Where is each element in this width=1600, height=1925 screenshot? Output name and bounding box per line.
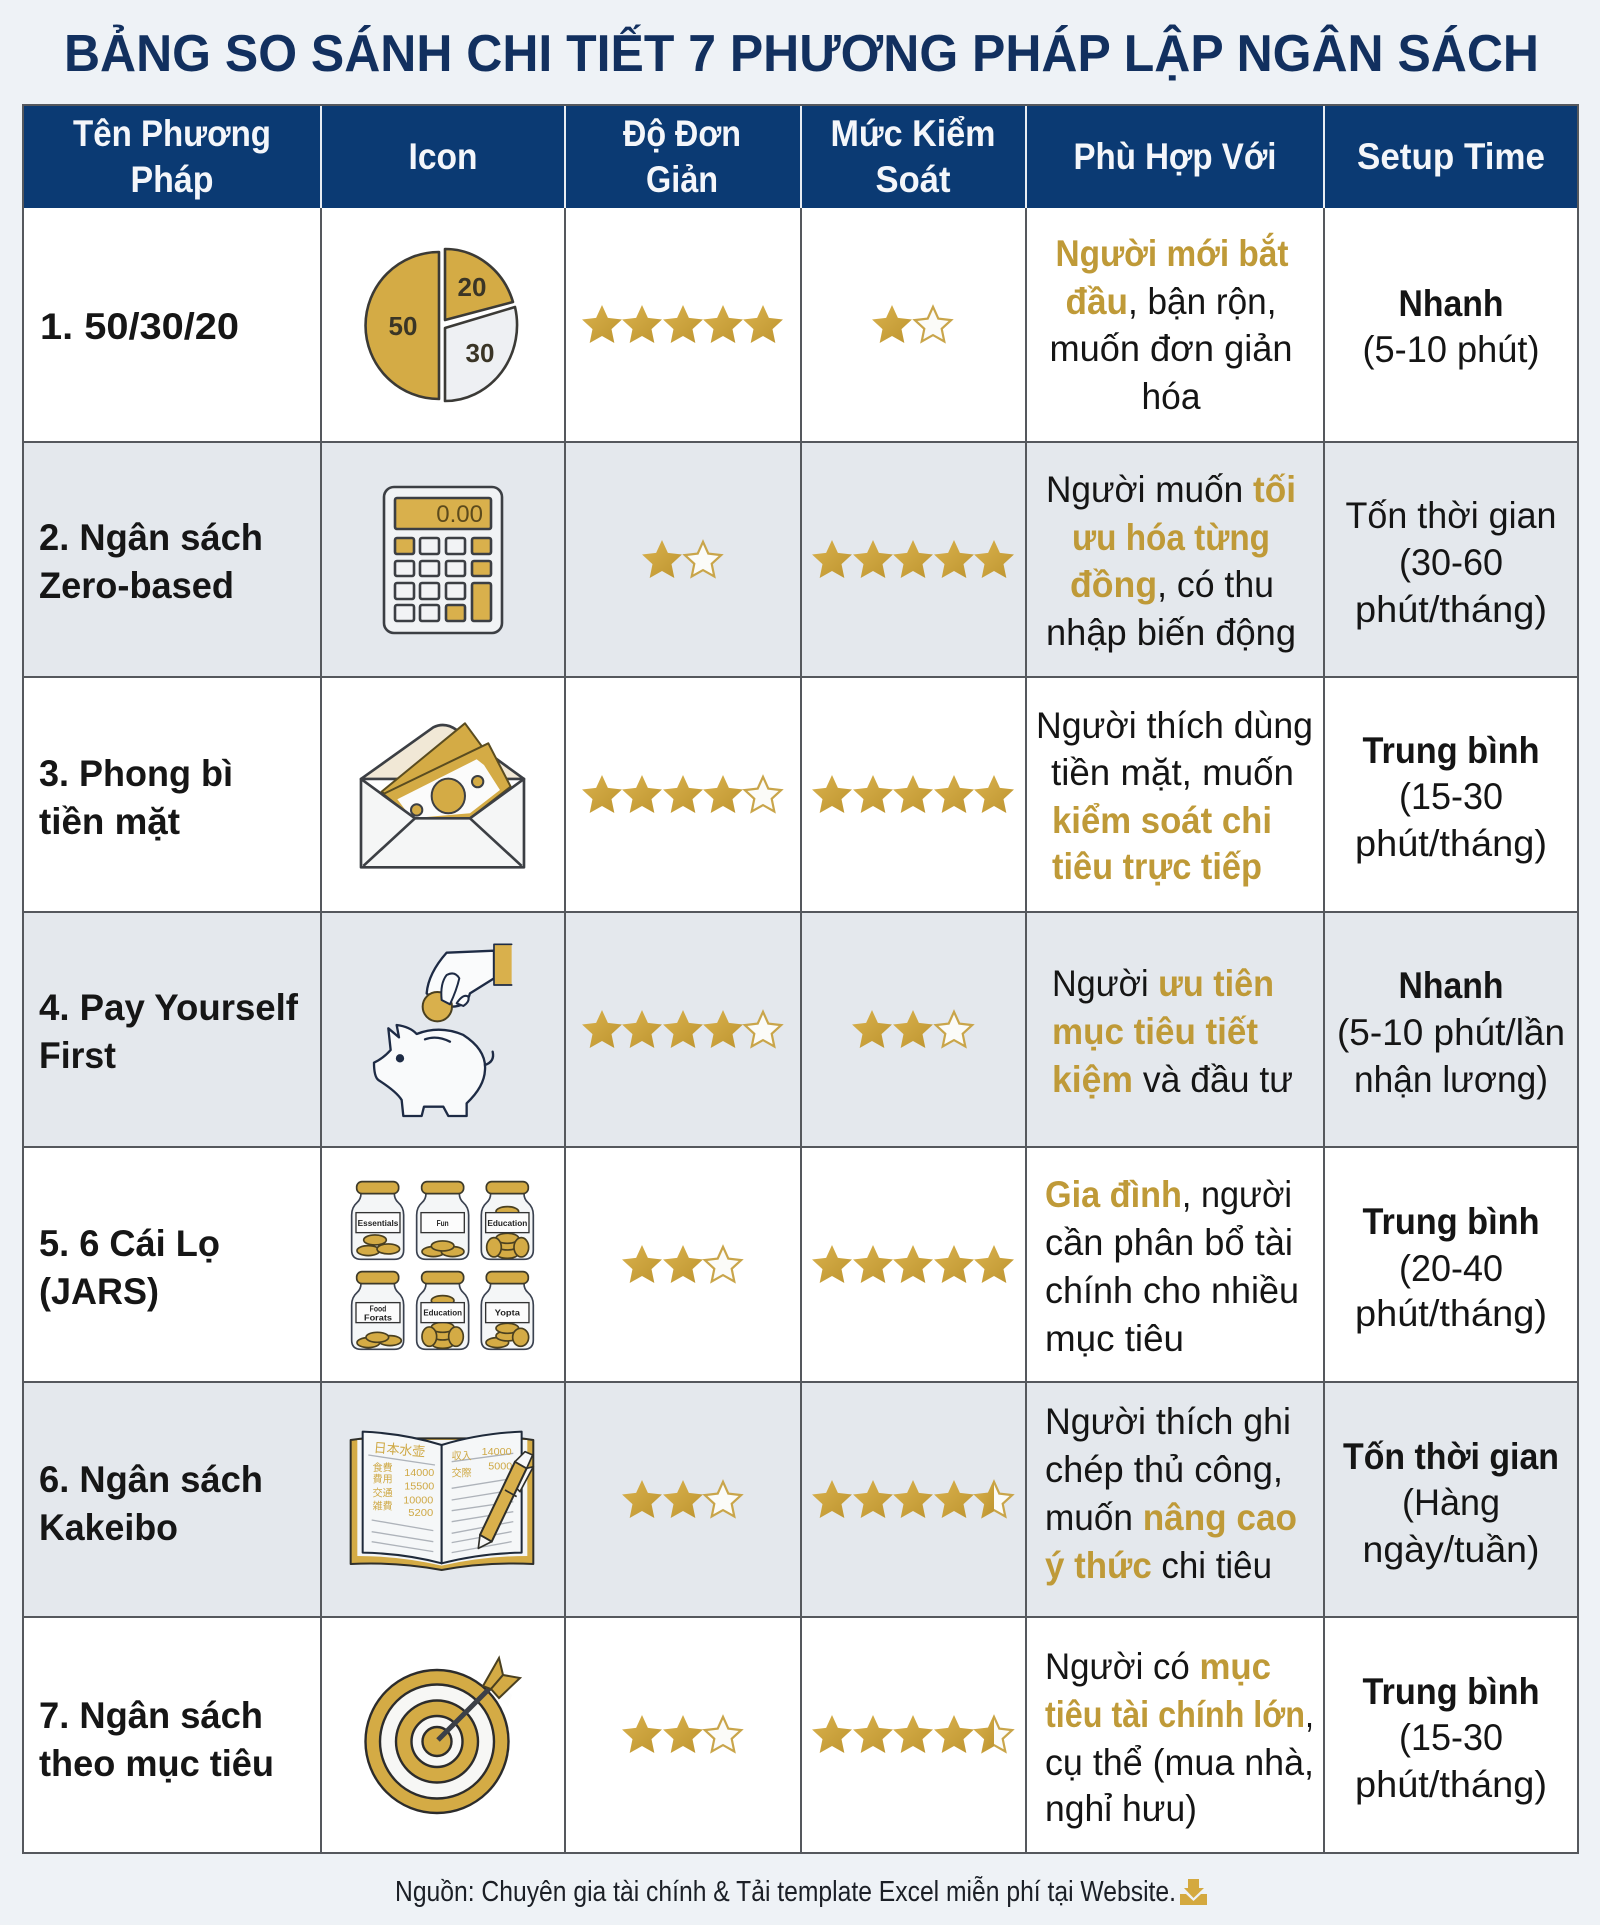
setup time: phút/tháng) xyxy=(1355,823,1547,864)
icon: six jars with coins: Food xyxy=(370,1304,386,1314)
icon: open notebook with pen: 10000 xyxy=(403,1495,434,1506)
method name: (JARS) xyxy=(39,1271,159,1312)
header: Mức Kiểm Soát: Mức Kiểm xyxy=(830,113,996,154)
icon: open notebook with pen: 交通 xyxy=(373,1488,393,1500)
method name: 1. 50/30/20 xyxy=(40,306,239,347)
control stars: 2 xyxy=(852,1010,972,1048)
method name: Kakeibo xyxy=(39,1507,178,1548)
icon: pie chart: 50 xyxy=(389,311,417,341)
header: Icon: Icon xyxy=(408,136,478,177)
setup time: (30-60 xyxy=(1399,542,1503,583)
icon: open notebook with pen: 5000 xyxy=(488,1461,513,1472)
icon: six jars with coins: Yopta xyxy=(495,1308,520,1318)
method name: 3. Phong bì xyxy=(39,753,233,794)
setup time: Nhanh xyxy=(1398,965,1504,1006)
icon: pie chart: 30 xyxy=(466,338,494,368)
table header row xyxy=(22,104,1579,208)
icon: download xyxy=(1180,1879,1207,1905)
method name: theo mục tiêu xyxy=(39,1743,274,1784)
row 5: 6 Cái Lọ (JARS) xyxy=(22,1147,1579,1382)
setup time: (15-30 xyxy=(1399,1717,1503,1758)
method name: tiền mặt xyxy=(39,801,180,842)
method name: 7. Ngân sách xyxy=(39,1695,263,1736)
header: Setup Time: Setup Time xyxy=(1357,136,1545,177)
icon: open notebook with pen: 費用 xyxy=(373,1473,393,1486)
icon: pie chart xyxy=(366,249,517,401)
setup time: (20-40 xyxy=(1399,1248,1503,1289)
row 1: 50/30/20 xyxy=(22,208,1579,442)
icon: piggy bank with coin xyxy=(374,944,512,1116)
suited for: Người thích dùng xyxy=(1036,705,1313,746)
simplicity stars: 4 xyxy=(582,1010,781,1048)
icon: pie chart: 20 xyxy=(458,272,486,302)
icon: six jars with coins: Education xyxy=(423,1308,462,1318)
method name: 4. Pay Yourself xyxy=(39,987,299,1028)
setup time: ngày/tuần) xyxy=(1362,1529,1540,1570)
suited for: hóa xyxy=(1142,376,1201,417)
suited for: cụ thể (mua nhà, xyxy=(1045,1742,1314,1783)
setup time: phút/tháng) xyxy=(1355,589,1547,630)
setup time: phút/tháng) xyxy=(1355,1293,1547,1334)
simplicity stars: 2 xyxy=(622,1480,741,1518)
suited for: chính cho nhiều xyxy=(1045,1270,1299,1311)
footer source note: Nguồn: Chuyên gia tài chính & Tải template Excel miễn phí tại Website. xyxy=(395,1876,1176,1908)
setup time: Tốn thời gian xyxy=(1346,495,1556,536)
suited for: đầu, bận rộn, xyxy=(1066,281,1284,322)
suited for: ý thức chi tiêu xyxy=(1045,1545,1279,1586)
suited for: nghỉ hưu) xyxy=(1045,1788,1197,1829)
control stars: 4.5 xyxy=(812,1715,1012,1753)
icon: six jars with coins: Education xyxy=(487,1218,527,1228)
setup time: Trung bình xyxy=(1362,730,1540,771)
simplicity stars: 1 xyxy=(642,540,721,578)
row 6: Kakeibo xyxy=(22,1382,1579,1617)
suited for: mục tiêu xyxy=(1045,1318,1184,1359)
suited for: tiêu trực tiếp xyxy=(1052,846,1262,887)
suited for: muốn nâng cao xyxy=(1045,1497,1305,1538)
icon: open notebook with pen: 5200 xyxy=(408,1508,434,1519)
setup time: phút/tháng) xyxy=(1355,1764,1547,1805)
icon: envelope with cash xyxy=(361,723,524,867)
suited for: Người thích ghi xyxy=(1045,1401,1291,1442)
header: Độ Đơn Giản: Giản xyxy=(646,159,718,200)
header: Độ Đơn Giản: Độ Đơn xyxy=(623,113,741,154)
suited for: cần phân bổ tài xyxy=(1045,1222,1293,1263)
suited for: đồng, có thu xyxy=(1070,564,1278,605)
method name: 5. 6 Cái Lọ xyxy=(39,1223,220,1264)
title: BẢNG SO SÁNH CHI TIẾT 7 PHƯƠNG PHÁP LẬP NGÂN SÁCH xyxy=(64,24,1539,83)
icon: open notebook with pen: 収入 xyxy=(452,1450,472,1462)
suited for: tiêu tài chính lớn, xyxy=(1045,1694,1343,1735)
setup time: (15-30 xyxy=(1399,776,1503,817)
suited for: nhập biến động xyxy=(1046,612,1296,653)
control stars: 1 xyxy=(872,305,951,343)
suited for: kiệm và đầu tư xyxy=(1052,1059,1300,1100)
suited for: Người mới bắt xyxy=(1056,232,1288,274)
suited for: Người có mục xyxy=(1045,1646,1276,1687)
suited for: Người muốn tối xyxy=(1046,469,1298,510)
row 7: theo mục tiêu xyxy=(22,1617,1579,1853)
control stars: 4.5 xyxy=(812,1480,1012,1518)
icon: open notebook with pen: 14000 xyxy=(404,1468,435,1479)
icon: open notebook with pen xyxy=(351,1432,533,1570)
simplicity stars: 5 xyxy=(582,305,783,343)
setup time: (5-10 phút) xyxy=(1362,329,1540,370)
header: Tên Phương Pháp: Tên Phương xyxy=(73,113,271,154)
row 3: Phong bì tiền mặt xyxy=(22,677,1579,912)
suited for: mục tiêu tiết xyxy=(1052,1011,1258,1052)
setup time: (Hàng xyxy=(1402,1482,1500,1523)
row 4: Pay Yourself First xyxy=(22,912,1579,1147)
icon: six jars with coins: Fun xyxy=(437,1218,449,1228)
setup time: nhận lương) xyxy=(1354,1059,1548,1100)
icon: calculator: 0.00 xyxy=(436,501,483,528)
row 2: Zero-based xyxy=(22,442,1579,677)
method name: First xyxy=(39,1035,116,1076)
header: Mức Kiểm Soát: Soát xyxy=(876,159,950,200)
suited for: Người ưu tiên xyxy=(1052,963,1284,1004)
setup time: (5-10 phút/lần xyxy=(1337,1012,1565,1053)
icon: open notebook with pen: 食費 xyxy=(373,1461,393,1474)
icon: open notebook with pen: 日本水壶 xyxy=(373,1440,426,1459)
icon: six jars with coins: Forats xyxy=(364,1313,392,1323)
icon: six jars with coins xyxy=(352,1182,533,1349)
icon: open notebook with pen: 交際 xyxy=(452,1468,472,1480)
suited for: tiền mặt, muốn xyxy=(1051,752,1294,793)
setup time: Trung bình xyxy=(1362,1671,1540,1712)
header: Tên Phương Pháp: Pháp xyxy=(130,159,214,200)
control stars: 5 xyxy=(812,540,1014,578)
header: Phù Hợp Với: Phù Hợp Với xyxy=(1074,136,1276,177)
icon: open notebook with pen: 15500 xyxy=(404,1481,435,1492)
setup time: Tốn thời gian xyxy=(1343,1436,1559,1477)
method name: Zero-based xyxy=(39,565,234,606)
suited for: Gia đình, người xyxy=(1045,1174,1301,1215)
method name: 2. Ngân sách xyxy=(39,517,263,558)
icon: calculator xyxy=(384,487,502,633)
icon: open notebook with pen: 14000 xyxy=(482,1447,512,1458)
control stars: 5 xyxy=(812,1245,1014,1283)
simplicity stars: 2 xyxy=(622,1715,741,1753)
suited for: kiểm soát chi xyxy=(1052,800,1272,841)
icon: open notebook with pen: 雑費 xyxy=(373,1499,393,1512)
simplicity stars: 2 xyxy=(622,1245,741,1283)
control stars: 5 xyxy=(812,775,1014,813)
icon: six jars with coins: Essentials xyxy=(358,1218,399,1228)
suited for: ưu hóa từng xyxy=(1072,517,1270,558)
simplicity stars: 4 xyxy=(582,775,781,813)
icon: target with arrow xyxy=(366,1658,520,1813)
suited for: muốn đơn giản xyxy=(1050,328,1292,369)
suited for: chép thủ công, xyxy=(1045,1449,1283,1490)
setup time: Nhanh xyxy=(1398,283,1504,324)
method name: 6. Ngân sách xyxy=(39,1459,263,1500)
setup time: Trung bình xyxy=(1362,1201,1540,1242)
